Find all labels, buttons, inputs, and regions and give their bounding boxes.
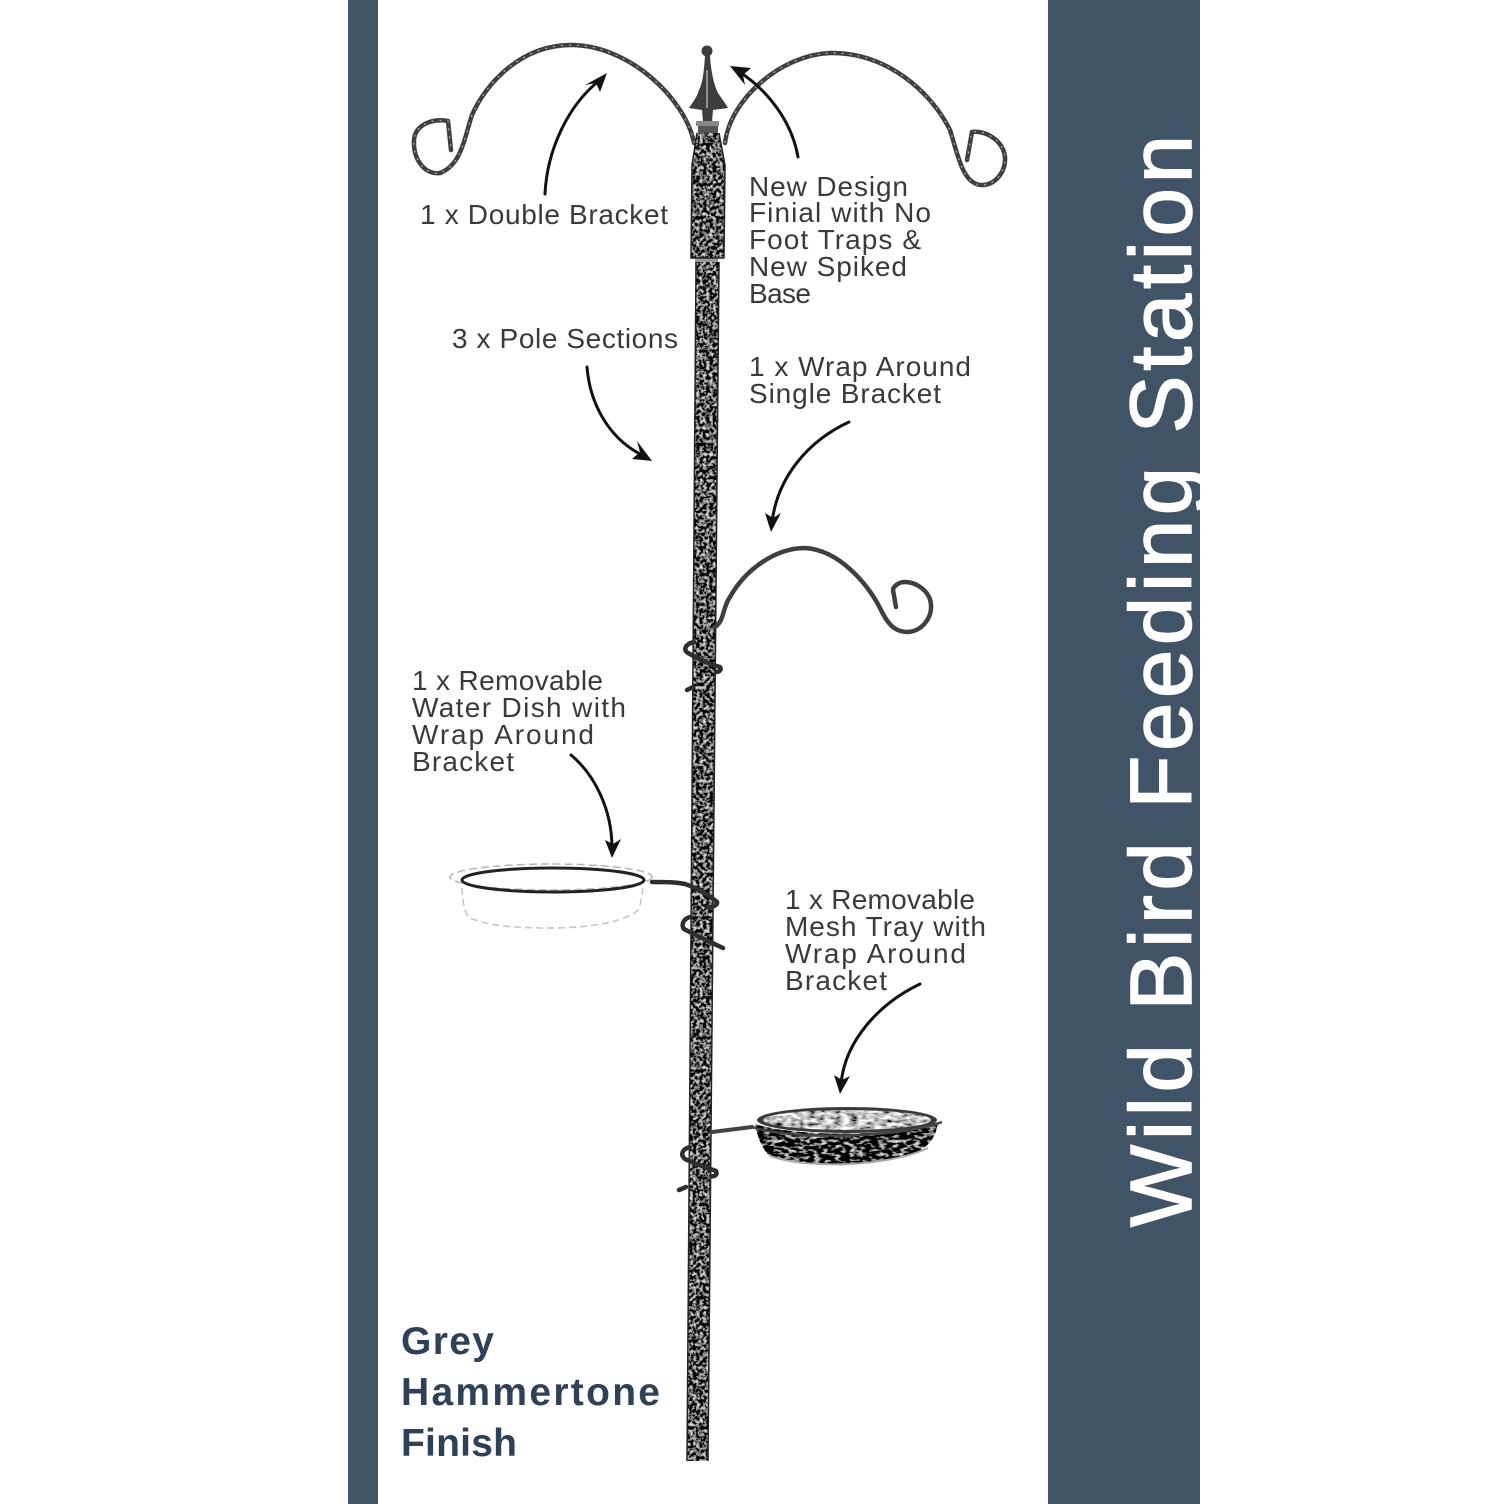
label: finial: Foot Traps &: [749, 224, 921, 255]
label: finial: Finial with No: [749, 197, 931, 228]
arrow: finial: [730, 66, 798, 157]
label: finial: New Spiked: [749, 251, 907, 282]
double bracket: [414, 45, 1005, 185]
finial: [689, 46, 728, 133]
arrow: double bracket: [545, 73, 607, 194]
arrow: water dish: [571, 755, 621, 858]
label: water dish: Water Dish with: [412, 692, 626, 723]
label: double bracket: 1 x Double Bracket: [420, 199, 668, 230]
label: water dish: [412, 665, 626, 777]
top sleeve: [690, 132, 726, 259]
arrow: single bracket: [765, 422, 849, 532]
label: finial: [749, 171, 931, 309]
label: mesh tray: Mesh Tray with: [785, 911, 986, 942]
mesh tray: [679, 1107, 945, 1190]
finish caption: Finish: [401, 1422, 517, 1465]
label: mesh tray: 1 x Removable: [785, 884, 975, 915]
label: finial: New Design: [749, 171, 908, 202]
label: single bracket: [749, 351, 971, 409]
label: mesh tray: [785, 884, 986, 996]
label: pole sections: 3 x Pole Sections: [452, 323, 678, 354]
label: water dish: Wrap Around: [412, 719, 594, 750]
label: mesh tray: Wrap Around: [785, 938, 966, 969]
finish caption: Hammertone: [401, 1371, 660, 1414]
label: finial: Base: [749, 278, 811, 309]
label: water dish: Bracket: [412, 746, 514, 777]
feeding station pole: [686, 258, 720, 1461]
label: mesh tray: Bracket: [785, 965, 887, 996]
left navy band: [348, 0, 378, 1504]
finish caption: Grey: [401, 1320, 494, 1363]
label: single bracket: 1 x Wrap Around: [749, 351, 971, 382]
arrow: mesh tray: [834, 984, 920, 1094]
finish caption: [401, 1320, 660, 1465]
single wrap around bracket: [685, 548, 931, 690]
arrow: pole sections: [587, 367, 652, 461]
water dish: [450, 864, 723, 948]
right navy panel: [1048, 0, 1200, 1504]
label: water dish: 1 x Removable: [412, 665, 603, 696]
vertical title: Wild Bird Feeding Station: [1113, 135, 1210, 1227]
label: single bracket: Single Bracket: [749, 378, 941, 409]
